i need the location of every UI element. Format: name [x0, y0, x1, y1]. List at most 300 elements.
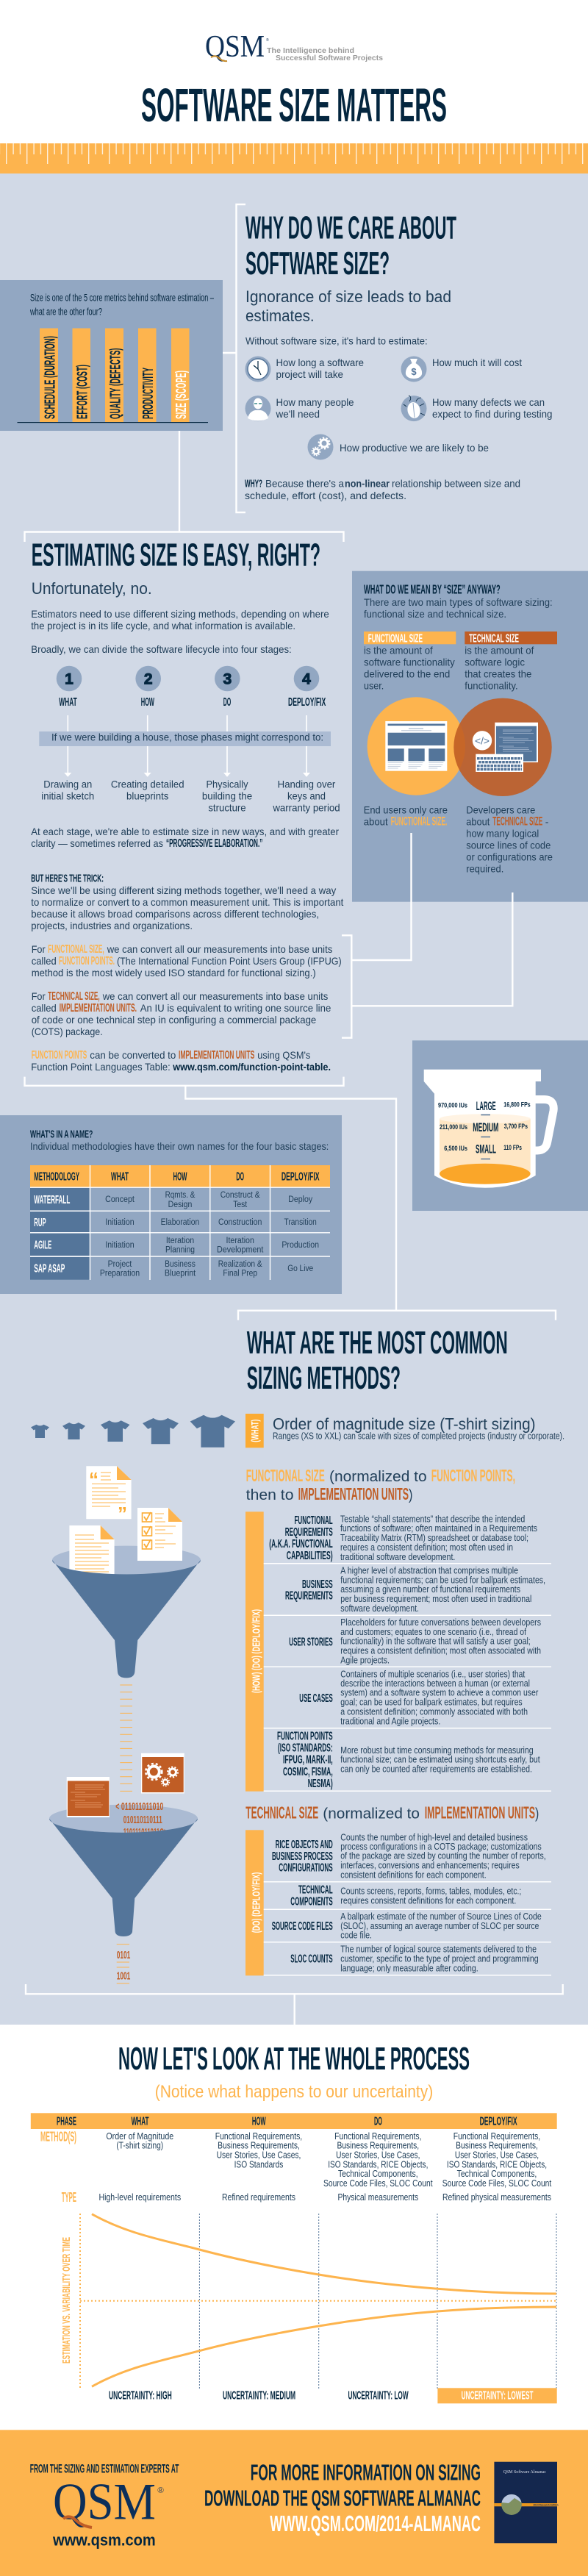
technical size definition: TECHNICAL SIZE: [469, 632, 519, 645]
heading: functional size: FUNCTION POINTS,: [431, 1466, 515, 1485]
table: functional methods: [245, 1511, 551, 1792]
chart: uncertainty cone: [60, 2214, 556, 2389]
text: progressive elaboration: “PROGRESSIVE ELABORATION.”: [166, 837, 262, 850]
row: source code files: code file.: [340, 1931, 372, 1941]
text: why non-linear: Because there's a: [265, 478, 344, 490]
table: methodology stages: METHODOLOGY: [34, 1171, 79, 1184]
heading: technical size: ): [535, 1806, 539, 1822]
developers text: or configurations are: [466, 851, 553, 863]
band: house analogy: If we were building a house, those phases might correspond to:: [51, 731, 323, 743]
panel: what do we mean by size: FUNCTIONAL SIZE.: [391, 815, 447, 829]
row: user stories: requires a consistent definition; most often associated with: [340, 1645, 541, 1656]
house phase: drawing: Drawing an: [43, 779, 92, 790]
icon: money bag: [401, 356, 426, 382]
row: functional requirements: Testable “shall statements” that describe the intended: [340, 1514, 525, 1524]
binary code: < 011011011010: [115, 1801, 163, 1813]
text: functional size conversion: (The International Function Point Users Group (IFPUG): [117, 955, 342, 967]
row: sloc counts: The number of logical source statements delivered to the: [340, 1944, 537, 1955]
row: rice objects: of the package are sized by counting the number of reports,: [340, 1851, 546, 1861]
stage 4 deploy/fix: DEPLOY/FIX: [288, 696, 326, 709]
table: methodology stages: WHAT: [111, 1171, 129, 1184]
row: user stories: functionality) in the software that will satisfy a user goal;: [340, 1636, 531, 1647]
row: technical components: requires consistent definitions for each component.: [340, 1895, 516, 1906]
house phase: keys: warranty period: [272, 802, 340, 814]
row: use cases: a consistent definition; commonly associated with both: [340, 1706, 528, 1717]
row: business requirements: A higher level of abstraction that comprises multiple: [340, 1566, 518, 1576]
text: technical size conversion: For: [32, 990, 46, 1002]
text: functional size conversion: [32, 943, 342, 978]
table: process phases: METHOD(S): [40, 2130, 76, 2144]
functional size definition: user.: [364, 679, 384, 691]
table: process phases: [31, 2113, 557, 2205]
text: t-shirt sizing: [273, 1415, 564, 1442]
row: technical components: TECHNICAL: [298, 1884, 333, 1897]
heading: why do we care: [245, 210, 456, 282]
QSM logo footer: QSM: [53, 2474, 156, 2531]
metrics question text: Size is one of the 5 core metrics behind software estimation –: [30, 293, 214, 303]
almanac book cover: 2014 Research Edition: [534, 2504, 559, 2507]
QSM logo header: QSM: [205, 30, 265, 64]
text: languages table: IMPLEMENTATION UNITS: [179, 1049, 254, 1062]
bar chart: five metrics: SIZE (SCOPE): [173, 371, 190, 419]
funnel output: binary: 0101: [117, 1950, 130, 1961]
developers text: source lines of code: [466, 840, 551, 851]
row: functional requirements: functions of software; often maintained in a Requirements: [340, 1523, 537, 1534]
website: www.qsm.com: [52, 2531, 156, 2550]
row: rice objects: [272, 1832, 546, 1880]
technical size definition: software logic: [465, 656, 525, 668]
icon: code window: [495, 723, 538, 762]
house phase: structure: Physically: [206, 779, 248, 790]
house phase: drawing: [41, 779, 94, 802]
table: methodology stages: Blueprint: [165, 1270, 196, 1278]
text: estimators: Broadly, we can divide the software lifecycle into four stages:: [31, 643, 292, 655]
uncertainty labels: UNCERTAINTY: HIGH: [109, 2390, 172, 2403]
text: how long: How long a software: [276, 357, 364, 368]
technical size definition: is the amount of: [465, 644, 534, 656]
table: methodology stages: HOW: [173, 1171, 187, 1184]
subheading: ignorance of size: estimates.: [245, 307, 315, 325]
small: 110 FPs: [503, 1144, 522, 1152]
methods: what: (T-shirt sizing): [116, 2141, 163, 2151]
table: methodology stages: Iteration: [226, 1237, 254, 1245]
table: methodology stages: Concept: [105, 1195, 135, 1204]
table: methodology stages: Preparation: [100, 1270, 140, 1278]
text: t-shirt sizing: Order of magnitude size (T-shirt sizing): [273, 1415, 536, 1434]
beaker: size scale: [424, 1070, 553, 1188]
heading: most common sizing methods: [247, 1325, 508, 1396]
table: methodology stages: AGILE: [34, 1239, 51, 1252]
venn circle: functional: [368, 697, 465, 795]
text: the trick: because it allows broad comparisons across different technologies,: [31, 908, 319, 920]
row: source code files: (SLOC), assuming an average number of SLOC per source: [340, 1921, 539, 1931]
methods: what: [106, 2131, 173, 2151]
stage 3 do: 3: [223, 671, 232, 688]
table: methodology stages: Construction: [218, 1218, 262, 1227]
text: technical size conversion: called: [32, 1002, 57, 1014]
methods: deploy/fix: User Stories, Use Cases,: [455, 2150, 539, 2160]
text: how many people: [276, 396, 354, 420]
methods: how: Functional Requirements,: [215, 2131, 302, 2142]
row: use cases: goal; can be used for ballpark estimates, but requires: [340, 1697, 523, 1708]
row: function points: FUNCTION POINTS: [277, 1731, 333, 1743]
icon: code window: [67, 1777, 110, 1817]
row: use cases: system) and a software system to achieve a common user: [340, 1688, 538, 1698]
footer: [0, 2430, 588, 2576]
bar chart: five metrics: EFFORT (COST): [75, 365, 91, 419]
intro: Individual methodologies have their own names for the four basic stages:: [30, 1140, 329, 1152]
text: progressive elaboration: [31, 826, 339, 850]
row: user stories: Placeholders for future conversations between developers: [340, 1617, 541, 1628]
row: source code files: [272, 1911, 542, 1941]
developers text: how many logical: [466, 828, 539, 840]
stage 1 what: WHAT: [59, 696, 77, 709]
subheading: unfortunately: Unfortunately, no.: [32, 579, 152, 598]
row: function points: functional size; can be estimated using shortcuts early, but: [340, 1755, 540, 1765]
text: languages table: using QSM's: [257, 1049, 310, 1061]
uncertainty labels: UNCERTAINTY: MEDIUM: [223, 2390, 295, 2403]
stage 2 how: 2: [144, 671, 153, 688]
table: methodology stages: DEPLOY/FIX: [282, 1171, 320, 1184]
heading: functional size: (normalized to: [329, 1469, 427, 1485]
text: estimators: [31, 608, 329, 655]
heading: functional size: then to: [246, 1487, 294, 1503]
methods: do: User Stories, Use Cases,: [336, 2150, 420, 2160]
footer: FROM THE SIZING AND ESTIMATION EXPERTS AT: [30, 2461, 179, 2475]
row: sloc counts: customer, specific to the type of project and programming: [340, 1954, 539, 1964]
icon: keyboard: [476, 754, 523, 772]
large: 16,800 FPs: [503, 1101, 531, 1109]
table: methodology stages: Development: [217, 1246, 264, 1255]
metrics question text: what are the other four?: [29, 306, 102, 318]
house phase: blueprints: [111, 779, 184, 802]
developers text: required.: [466, 863, 503, 875]
call to action: [204, 2460, 481, 2536]
table: functional methods: (HOW) (DO) (DEPLOY/FIX): [250, 1609, 262, 1693]
table: methodology stages: Test: [233, 1201, 248, 1209]
heading: why do we care: SOFTWARE SIZE?: [245, 246, 390, 282]
table: methodology stages: RUP: [34, 1217, 46, 1229]
table: process phases: WHAT: [132, 2116, 149, 2128]
stage 3 do: [215, 666, 240, 709]
functional size definition: delivered to the end: [364, 668, 450, 679]
large: 970,000 IUs: [438, 1101, 467, 1109]
table: methodology stages: Go Live: [287, 1264, 313, 1273]
technical size definition: that creates the: [465, 668, 531, 679]
row: user stories: USER STORIES: [289, 1636, 333, 1648]
panel: five core metrics: [0, 280, 223, 431]
text: progressive elaboration: At each stage, we're able to estimate size in new ways, and with greater: [31, 826, 339, 837]
house phase: blueprints: Creating detailed: [111, 779, 184, 790]
text: functional size conversion: FUNCTIONAL SIZE,: [48, 943, 104, 956]
row: rice objects: interfaces, conversions and enhancements; requires: [340, 1861, 520, 1871]
row: business requirements: functional requirements; can be used for ballpark estimates,: [340, 1575, 545, 1585]
end users text: [364, 804, 448, 829]
row: business requirements: software development.: [340, 1603, 419, 1614]
methods: deploy/fix: Business Requirements,: [456, 2141, 538, 2151]
row: function points: (ISO STANDARDS:: [278, 1742, 333, 1755]
table: methodology stages: Business: [165, 1260, 196, 1269]
icon: gears window: [141, 1753, 184, 1794]
stage 2 how: HOW: [141, 696, 154, 709]
row: functional requirements: traditional software development.: [340, 1552, 455, 1562]
type row: [62, 2190, 551, 2205]
text: languages table: can be converted to: [90, 1049, 176, 1061]
bar chart: five metrics: [18, 328, 208, 423]
icon: money bag: $: [411, 366, 417, 377]
text: how productive: How productive we are likely to be: [340, 442, 489, 454]
row: rice objects: BUSINESS PROCESS: [272, 1850, 333, 1863]
methods: how: [215, 2131, 302, 2169]
label: what: [245, 1414, 264, 1448]
large: LARGE: [476, 1100, 496, 1113]
row: functional requirements: (A.K.A. FUNCTIONAL: [269, 1538, 333, 1550]
icon: person: [245, 396, 270, 421]
venn circle: technical: [453, 698, 552, 796]
text: languages table: FUNCTION POINTS: [32, 1049, 87, 1062]
heading: most common sizing methods: SIZING METHODS?: [247, 1360, 401, 1396]
icon: code tag: </>: [475, 735, 490, 747]
row: function points: IFPUG, MARK-II,: [283, 1754, 333, 1767]
heading: estimating size: ESTIMATING SIZE IS EASY, RIGHT?: [32, 537, 320, 573]
row: functional requirements: [269, 1514, 537, 1562]
icon: checklist document: [137, 1508, 182, 1561]
technical size definition: functionality.: [465, 679, 518, 691]
bar chart: five metrics: PRODUCTIVITY: [140, 368, 157, 419]
methods: do: Functional Requirements,: [334, 2131, 422, 2142]
table: methodology stages: [30, 1165, 330, 1280]
icon: text document: [69, 1525, 115, 1577]
row: rice objects: process configurations in a COTS package; customizations: [340, 1842, 542, 1852]
row: rice objects: CONFIGURATIONS: [279, 1862, 333, 1875]
row: use cases: [299, 1669, 538, 1726]
stage 1 what: [57, 666, 82, 709]
house phase: keys: Handing over: [278, 779, 336, 790]
panel: name table background: [0, 1115, 342, 1294]
heading: technical size: TECHNICAL SIZE: [245, 1803, 318, 1822]
bar chart: five metrics: QUALITY (DEFECTS): [107, 348, 123, 419]
QSM logo header: The Intelligence behind: [267, 47, 354, 55]
small: [444, 1142, 522, 1156]
table: methodology stages: Production: [282, 1241, 319, 1250]
text: the trick: Since we'll be using different sizing methods together, we'll need a way: [31, 884, 336, 896]
table: methodology stages: Initiation: [105, 1218, 135, 1227]
table: process phases: DEPLOY/FIX: [480, 2116, 517, 2128]
table: methodology stages: Final Prep: [223, 1270, 257, 1278]
large: [438, 1100, 531, 1113]
developers text: [466, 804, 553, 875]
heading: technical size: (normalized to: [323, 1806, 420, 1822]
funnel output: binary: [117, 1944, 130, 1983]
text: how long: [276, 357, 364, 380]
methods: do: [323, 2131, 433, 2189]
stage 3 do: DO: [223, 696, 231, 709]
text: why non-linear: [245, 478, 520, 501]
binary code: 010110110111: [123, 1814, 162, 1826]
text: functional size conversion: we can convert all our measurements into base units: [107, 943, 332, 955]
text: functional size conversion: called: [32, 955, 57, 967]
functional size definition: FUNCTIONAL SIZE: [368, 632, 423, 645]
almanac book cover: QSM Software Almanac: [503, 2469, 546, 2475]
house phase: keys: keys and: [287, 790, 326, 802]
type row: TYPE: [62, 2190, 76, 2205]
methods: what: Order of Magnitude: [106, 2131, 173, 2142]
developers text: -: [545, 816, 549, 828]
table: methodology stages: Realization &: [218, 1260, 262, 1269]
text: how many people: we'll need: [276, 408, 320, 420]
type row: High-level requirements: [98, 2192, 181, 2203]
funnel output: binary: 1001: [117, 1970, 130, 1982]
subheading: uncertainty note: (Notice what happens to our uncertainty): [155, 2082, 433, 2102]
house phase: structure: building the: [202, 790, 252, 802]
type row: Refined physical measurements: [442, 2192, 551, 2203]
binary code: [115, 1801, 168, 1839]
subheading: ignorance of size: Ignorance of size leads to bad: [245, 287, 451, 306]
row: source code files: A ballpark estimate of the number of Source Lines of Code: [340, 1911, 542, 1922]
text: languages table: Function Point Languages Table:: [31, 1061, 171, 1073]
row: business requirements: [285, 1566, 545, 1614]
house phase: structure: structure: [208, 802, 246, 814]
methods: do: ISO Standards, RICE Objects,: [328, 2159, 428, 2169]
house phase: structure: [202, 779, 252, 814]
row: technical components: COMPONENTS: [290, 1896, 333, 1908]
methods: deploy/fix: Source Code Files, SLOC Count: [442, 2178, 552, 2189]
row: use cases: traditional and Agile projects.: [340, 1716, 440, 1726]
icon: bug: [401, 396, 426, 421]
house phase: keys: [272, 779, 340, 814]
funnel: bottom with code: [49, 1753, 198, 1936]
row: functional requirements: REQUIREMENTS: [285, 1526, 333, 1539]
table: methodology stages: DO: [236, 1171, 244, 1184]
medium: 211,000 IUs: [440, 1123, 467, 1131]
row: function points: can only be counted after requirements are established.: [340, 1764, 532, 1775]
text: languages table: [31, 1049, 331, 1073]
developers text: Developers care: [466, 804, 535, 816]
arrows: stages to house phases: [64, 715, 310, 777]
icon: quote document: ”: [118, 1503, 127, 1525]
text: technical size conversion: of code or one technical step in configuring a commercial package: [32, 1014, 316, 1026]
intro: There are two main types of software sizing:: [364, 596, 553, 608]
technical size definition: [465, 632, 557, 691]
house phase: drawing: initial sketch: [41, 790, 94, 802]
row: rice objects: Counts the number of high-level and detailed business: [340, 1832, 528, 1842]
icon: quote document: “: [89, 1468, 98, 1490]
methods: do: Source Code Files, SLOC Count: [323, 2178, 433, 2189]
table: methodology stages: Construct &: [220, 1191, 260, 1200]
uncertainty labels: [109, 2388, 557, 2403]
row: rice objects: RICE OBJECTS AND: [276, 1839, 333, 1851]
table: technical methods: [245, 1830, 551, 1975]
table: methodology stages: Deploy: [288, 1195, 312, 1204]
panel: what do we mean by size: [364, 582, 557, 875]
uncertainty labels: UNCERTAINTY: LOW: [348, 2390, 409, 2403]
table: process phases: DO: [374, 2116, 382, 2128]
table: technical methods: (DO) (DEPLOY/FIX): [250, 1872, 262, 1933]
text: progressive elaboration: clarity — sometimes referred as: [31, 837, 163, 849]
table: methodology stages: Planning: [165, 1246, 195, 1255]
icon: web page: [385, 721, 447, 771]
text: why non-linear: non-linear: [345, 478, 390, 490]
house phase: blueprints: blueprints: [126, 790, 168, 802]
QSM logo header: [205, 30, 383, 64]
row: functional requirements: requires a consistent definition; most often used in: [340, 1542, 513, 1553]
text: how much: How much it will cost: [432, 357, 522, 368]
table: methodology stages: Project: [108, 1260, 132, 1269]
medium: MEDIUM: [473, 1121, 498, 1134]
methods: deploy/fix: Functional Requirements,: [453, 2131, 540, 2142]
stage 4 deploy/fix: [288, 666, 326, 709]
row: function points: More robust but time consuming methods for measuring: [340, 1745, 534, 1756]
row: function points: [277, 1731, 540, 1790]
text: technical size conversion: (COTS) package.: [32, 1026, 103, 1037]
text: how many defects: [432, 396, 553, 420]
row: function points: NESMA): [308, 1778, 333, 1790]
text: how many people: How many people: [276, 396, 354, 408]
text: why non-linear: schedule, effort (cost), and defects.: [245, 490, 406, 501]
stage 1 what: 1: [65, 671, 74, 688]
label: what: (WHAT): [248, 1420, 260, 1442]
intro: functional size and technical size.: [364, 608, 506, 620]
QSM logo header: ®: [266, 37, 269, 43]
section background: [0, 173, 588, 2025]
text: how long: project will take: [276, 368, 343, 380]
text: the trick: to normalize or convert to a common measurement unit. This is important: [31, 896, 343, 908]
panel: what's in a name: [30, 1128, 330, 1280]
funnel flow lines: [120, 1685, 132, 1791]
text: the trick: [31, 872, 343, 931]
intro: [364, 596, 553, 620]
table: methodology stages: Rqmts. &: [165, 1191, 196, 1200]
QSM logo footer: ®: [157, 2485, 164, 2495]
row: business requirements: per business requirement; most often used in traditional: [340, 1594, 531, 1604]
row: user stories: and customers; equates to one scenario (i.e., thread of: [340, 1627, 526, 1637]
axis label: ESTIMATION VS. VARIABILITY OVER TIME: [60, 2237, 73, 2364]
heading: functional size: ): [409, 1487, 413, 1503]
medium: 3,700 FPs: [504, 1123, 528, 1131]
text: estimators: Estimators need to use different sizing methods, depending on where: [31, 608, 329, 620]
row: source code files: SOURCE CODE FILES: [272, 1920, 333, 1933]
binary code: 110111011011O>: [123, 1827, 168, 1839]
table: process phases: PHASE: [57, 2116, 76, 2128]
methods: deploy/fix: Technical Components,: [457, 2169, 537, 2179]
end users text: about: [364, 816, 388, 828]
functional size definition: software functionality: [364, 656, 455, 668]
text: functional size conversion: For: [32, 943, 46, 955]
small: SMALL: [476, 1142, 496, 1156]
row: user stories: Agile projects.: [340, 1655, 390, 1665]
text: functional size conversion: method is the most widely used ISO standard for functional sizing.): [32, 967, 316, 978]
row: rice objects: consistent definitions for each component.: [340, 1870, 487, 1880]
type row: Refined requirements: [222, 2192, 295, 2203]
lower curve: [92, 2307, 556, 2386]
bar chart: five metrics: SCHEDULE (DURATION): [43, 336, 59, 419]
functional size definition: [364, 632, 456, 691]
table: methodology stages: Iteration: [166, 1237, 194, 1245]
row: business requirements: assuming a given number of functional requirements: [340, 1584, 520, 1595]
functional size definition: is the amount of: [364, 644, 433, 656]
stage 2 how: [135, 666, 161, 709]
upper curve: [92, 2214, 556, 2294]
text: technical size conversion: [32, 990, 331, 1037]
row: functional requirements: FUNCTIONAL: [294, 1514, 333, 1527]
row: sloc counts: language; only measurable after coding.: [340, 1963, 478, 1973]
subheading: ignorance of size: [245, 287, 451, 325]
text: the trick: projects, industries and organizations.: [31, 920, 193, 931]
icon: clock: [245, 356, 270, 382]
text: languages table: www.qsm.com/function-point-table.: [172, 1061, 331, 1073]
intro text: Without software size, it's hard to estimate:: [245, 335, 428, 347]
type row: Physical measurements: [337, 2192, 418, 2203]
